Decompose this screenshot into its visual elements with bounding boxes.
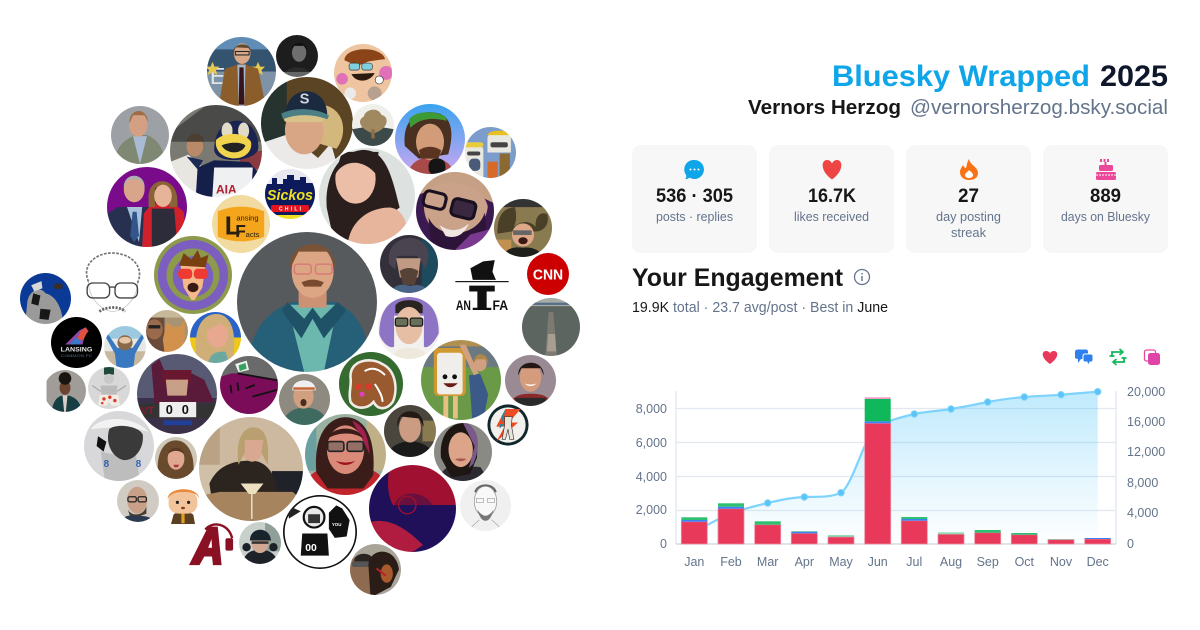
avatar: spiral cartoon with red glasses	[154, 236, 232, 314]
avatar: blue and red duotone portrait	[369, 465, 456, 552]
avatar: man with dachshund	[350, 544, 401, 595]
avatar: Sickos Chili logo: Sickos	[267, 187, 313, 204]
legend icon: replies chat	[1075, 350, 1093, 366]
avatar: maroon headset logo	[189, 523, 234, 566]
avatar: pencil sketch of bearded man	[460, 480, 511, 531]
month labels: Jan	[684, 555, 704, 569]
avatar: gingerbread cookie	[339, 352, 403, 416]
month labels: Sep	[977, 555, 999, 569]
avatar: Virginia Tech fan with scoreboard: 0	[166, 402, 173, 417]
avatar: pencil sketch with glasses	[86, 252, 140, 313]
avatar: woman with auburn hair	[155, 437, 197, 479]
avatar: duck mascot with man: AIA	[216, 182, 237, 196]
combined bar and line chart	[636, 385, 1165, 569]
avatar: person with purple hair	[378, 297, 440, 359]
avatar: Lansing Facts logo	[212, 195, 270, 253]
user name and handle: Vernors Herzog	[748, 97, 901, 119]
cumulative area and line	[694, 388, 1101, 544]
legend icon: reposts arrows	[1110, 349, 1126, 365]
avatar: woman in teal jacket	[46, 370, 86, 412]
avatar: Sickos mascot 00 logo: YOU	[332, 522, 341, 527]
avatar: man in brown jacket: E	[210, 63, 225, 89]
title: Bluesky Wrapped	[832, 60, 1090, 93]
month labels: Mar	[757, 555, 778, 569]
avatar: woman with patterned scarf	[434, 423, 492, 481]
avatar: Virginia Tech fan with scoreboard: 0	[182, 402, 189, 417]
right axis labels: 20,000	[1127, 385, 1165, 399]
user name and handle: @vernorsherzog.bsky.social	[910, 97, 1168, 119]
icon: info	[854, 270, 870, 284]
stat card: posts and replies	[632, 145, 757, 253]
right axis labels	[1127, 385, 1165, 551]
avatar: Sickos Chili logo	[265, 169, 315, 219]
right panel: profile stats and engagement chart	[632, 60, 1168, 569]
stat card: day posting streak: day posting	[936, 209, 1001, 224]
left axis labels	[636, 402, 667, 551]
avatar: man in Mariners cap	[261, 77, 353, 169]
avatar: woman at table with cocktail	[199, 417, 303, 521]
left axis labels: 4,000	[636, 470, 667, 484]
engagement summary line: 19.9K total · 23.7 avg/post · Best in June	[632, 300, 888, 316]
month labels: Apr	[795, 555, 814, 569]
stat card: posts and replies: posts · replies	[656, 209, 733, 224]
avatar: dark monochrome man	[276, 35, 318, 77]
stat card: likes received: likes received	[794, 209, 869, 224]
avatar: water at sunset	[522, 298, 580, 356]
month labels: May	[829, 555, 854, 569]
left axis labels: 0	[660, 537, 667, 551]
month labels: Feb	[720, 555, 742, 569]
avatar: red and blue Bowie badge	[487, 404, 529, 446]
avatar: Lansing Facts logo: F	[235, 221, 246, 241]
left axis labels: 2,000	[636, 503, 667, 517]
avatar: Sickos Chili logo: CHILI	[279, 206, 302, 212]
avatar: ANTFA table logo	[455, 260, 509, 313]
avatar: bison in cowboy hat: 8	[104, 459, 110, 470]
avatar: man with orange cat	[146, 310, 188, 352]
right axis labels: 4,000	[1127, 506, 1158, 520]
right axis labels: 0	[1127, 537, 1134, 551]
stat card: day posting streak: 27	[958, 186, 979, 207]
month labels: Jun	[868, 555, 888, 569]
avatar: bison in cowboy hat	[84, 411, 154, 481]
heading: Your Engagement: Your Engagement	[632, 264, 844, 292]
avatar: grey suit man	[111, 106, 169, 164]
legend icon: likes heart	[1043, 351, 1057, 364]
avatar: Sickos mascot 00 logo: 00	[305, 543, 317, 554]
avatar: man in Mariners cap: S	[300, 92, 310, 108]
avatar: toy figure with orange hair	[168, 489, 199, 524]
avatar: man in brown jacket	[207, 37, 276, 106]
avatar: woman with glasses and red top	[305, 414, 386, 495]
avatar: ANTFA table logo: AN	[456, 297, 471, 313]
month labels	[684, 555, 1109, 569]
avatar: Lansing Facts logo: acts	[246, 230, 260, 239]
stat card: days on Bluesky	[1043, 145, 1168, 253]
avatar: pop tart mascot with woman	[421, 340, 501, 420]
avatar: CNN logo: CNN	[533, 266, 563, 283]
stat card: likes received: 16.7K	[808, 186, 856, 207]
avatar: dark haired man in black	[384, 405, 436, 457]
stat card: posts and replies: 536 · 305	[656, 186, 733, 207]
left axis labels: 8,000	[636, 402, 667, 416]
avatar: Lansing Common logo	[51, 317, 102, 368]
avatar: blonde woman on Ukraine colours	[190, 312, 241, 363]
avatar: purple cartoon with hat	[220, 356, 278, 414]
avatar: Virginia Tech fan with scoreboard	[137, 354, 217, 434]
right axis labels: 8,000	[1127, 476, 1158, 490]
avatar: inflatable mascots	[465, 127, 516, 178]
avatar: Sickos mascot 00 logo	[283, 495, 357, 569]
avatar: ANTFA table logo: FA	[492, 297, 508, 313]
avatar: cartoon character pattern	[334, 44, 392, 102]
avatar: tree sculpture	[352, 104, 394, 146]
title: 2025	[1100, 60, 1168, 93]
avatar: Lansing Facts logo: L	[225, 212, 240, 240]
avatar: football figure on blue	[20, 273, 71, 324]
avatar: bald man with glasses	[117, 480, 159, 522]
stat card: likes received	[769, 145, 894, 253]
month labels: Nov	[1050, 555, 1073, 569]
avatar: man in viking hat	[494, 199, 552, 257]
right axis labels: 12,000	[1127, 445, 1165, 459]
avatar: CNN logo	[527, 253, 569, 295]
avatar: bison in cowboy hat: 8	[136, 459, 142, 470]
avatar: Lansing Facts logo: ansing	[236, 214, 259, 223]
avatar: cartoon man arms raised	[104, 326, 146, 368]
month labels: Jul	[906, 555, 922, 569]
avatar bubble cloud	[20, 35, 580, 595]
avatar: main portrait, man in denim jacket	[237, 232, 377, 372]
avatar: duck mascot with man	[170, 105, 262, 197]
month labels: Aug	[940, 555, 962, 569]
avatar: smiling man in red shirt	[505, 355, 556, 406]
month labels: Oct	[1015, 555, 1035, 569]
avatar: woman with long dark hair	[319, 148, 415, 244]
stacked monthly bars	[681, 397, 1111, 544]
stat card: day posting streak: streak	[951, 225, 986, 240]
month labels: Dec	[1087, 555, 1109, 569]
left axis labels: 6,000	[636, 436, 667, 450]
avatar: Lansing Common logo: COMMON FC	[61, 354, 93, 358]
avatar: man with wavy dark hair	[380, 235, 438, 293]
user name and handle	[748, 97, 1168, 119]
stat card: days on Bluesky: 889	[1090, 186, 1121, 207]
avatar: woman in winter hat	[239, 522, 281, 564]
avatar: Jeopardy host and contestant	[107, 167, 187, 247]
stat card: day posting streak	[906, 145, 1031, 253]
avatar: figure in polka dot boxers	[88, 367, 130, 409]
avatar: man in white cap and teal hoodie	[279, 374, 330, 425]
avatar: bearded man with glasses, purple tint	[416, 172, 494, 250]
avatar: Virginia Tech fan with scoreboard: VT	[141, 406, 155, 417]
avatar: Lansing Common logo: LANSING	[61, 347, 93, 354]
legend icon: quotes squares	[1144, 350, 1160, 365]
avatar: man with green headband	[395, 104, 465, 174]
right axis labels: 16,000	[1127, 415, 1165, 429]
stat card: days on Bluesky: days on Bluesky	[1061, 209, 1150, 224]
